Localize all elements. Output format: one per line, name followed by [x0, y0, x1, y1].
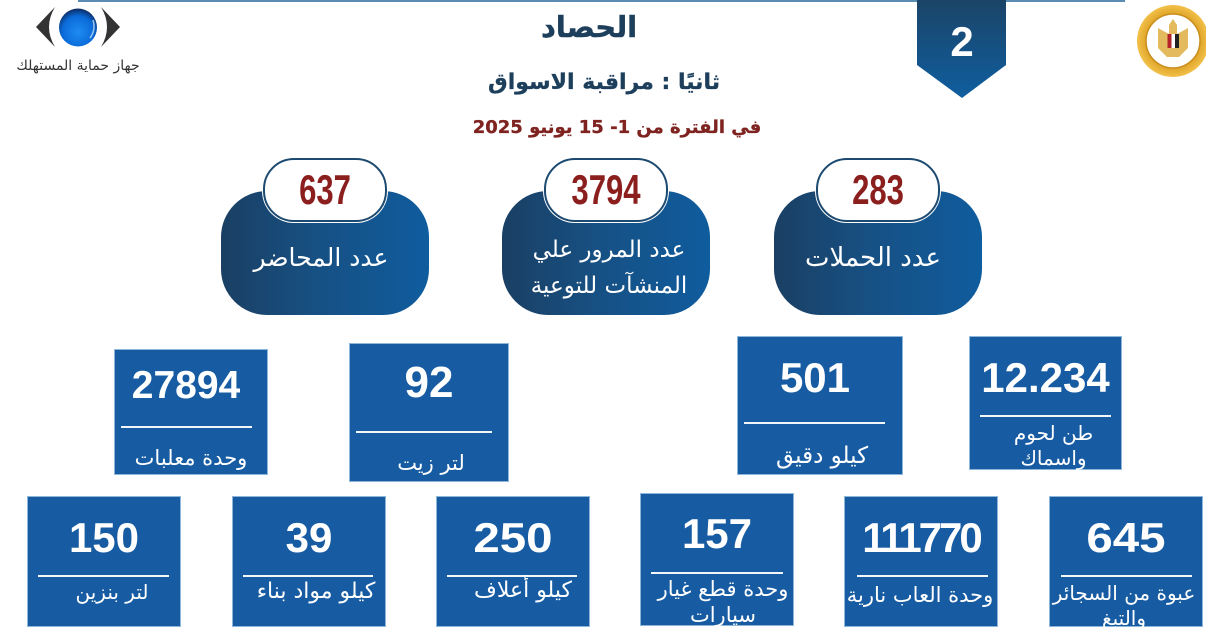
panel label: عدد المحاضر: [254, 243, 388, 272]
badge: page number: 2: [950, 18, 974, 65]
card: cigarettes and tobacco: [1049, 496, 1203, 627]
count pill: [544, 158, 668, 222]
logo: consumer protection agency: [16, 7, 140, 74]
count pill: 637: [299, 166, 351, 213]
panel: number of campaigns: [774, 158, 982, 315]
panel body: [502, 191, 710, 315]
card: canned goods: [114, 349, 268, 475]
card: meat and fish: طن لحوم: [1014, 421, 1093, 445]
top rule: [78, 0, 1125, 2]
card: fireworks: وحدة العاب نارية: [847, 583, 993, 607]
card: flour: كيلو دقيق: [776, 443, 868, 469]
card: petrol: 150: [69, 514, 139, 561]
card: oil: [349, 343, 509, 482]
title: الحصاد: [541, 10, 637, 44]
card: feed: كيلو أعلاف: [474, 578, 572, 603]
card: canned goods: وحدة معلبات: [135, 446, 247, 470]
badge: page number: [917, 0, 1006, 98]
panel label: [531, 237, 687, 299]
card: fireworks: [844, 496, 998, 627]
card: spare parts: [640, 493, 794, 626]
card: spare parts: 157: [682, 510, 752, 557]
card: spare parts: سيارات: [690, 603, 756, 627]
card: feed: [436, 496, 590, 627]
panel label: عدد الحملات: [805, 243, 941, 273]
count pill: 283: [852, 166, 904, 213]
panel label: المنشآت للتوعية: [531, 273, 687, 299]
card: building materials: 39: [286, 514, 332, 561]
card: petrol: [27, 496, 181, 627]
card: spare parts: وحدة قطع غيار: [658, 577, 788, 601]
subtitle: ثانيًا : مراقبة الاسواق: [488, 70, 720, 95]
icon: eye: [36, 7, 120, 47]
panel: number of awareness visits: [502, 158, 710, 315]
card: meat and fish: [969, 336, 1122, 470]
card: meat and fish: واسماك: [1020, 446, 1087, 470]
card: flour: [737, 336, 903, 475]
card: cigarettes and tobacco: 645: [1086, 514, 1166, 561]
card: canned goods: 27894: [132, 364, 240, 407]
count pill: 3794: [571, 166, 641, 213]
card: meat and fish: 12.234: [981, 354, 1110, 401]
card: petrol: لتر بنزين: [76, 580, 148, 604]
card: building materials: كيلو مواد بناء: [257, 579, 375, 604]
count pill: [263, 158, 387, 222]
panel body: [774, 191, 982, 315]
count pill: [816, 158, 940, 222]
card: fireworks: 111770: [862, 514, 980, 561]
card: cigarettes and tobacco: عبوة من السجائر: [1053, 581, 1195, 605]
date line: في الفترة من 1- 15 يونيو 2025: [473, 117, 761, 138]
panel: number of reports: [221, 158, 429, 315]
icon: state seal: [1137, 5, 1206, 77]
card: oil: 92: [405, 358, 453, 407]
card: feed: 250: [473, 514, 553, 561]
card: oil: لتر زيت: [397, 451, 465, 475]
card: flour: 501: [780, 354, 850, 401]
logo caption: جهاز حماية المستهلك: [16, 58, 140, 74]
panel body: [221, 191, 429, 315]
card: building materials: [232, 496, 386, 627]
panel label: عدد المرور علي: [533, 237, 685, 263]
